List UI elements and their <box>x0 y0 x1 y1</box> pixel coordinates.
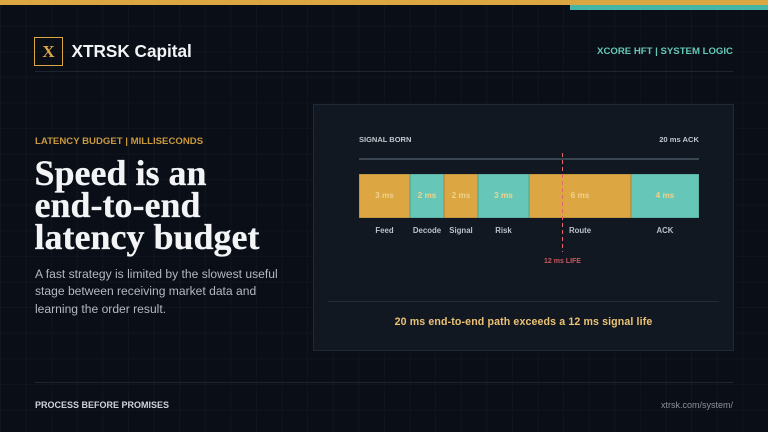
description: learning the order result. <box>35 302 166 316</box>
top accent bar: gold <box>0 0 768 5</box>
stage: signal: Signal <box>449 226 473 235</box>
stacked latency bar <box>359 174 699 218</box>
segment: ack <box>631 174 699 218</box>
label: total ack: 20 ms ACK <box>659 135 699 144</box>
headline: Speed is an <box>34 153 207 193</box>
brand name: XTRSK Capital <box>72 41 192 61</box>
logo mark <box>34 37 63 66</box>
stage: feed: Feed <box>375 226 394 235</box>
conclusion: 20 ms end-to-end path exceeds a 12 ms signal life <box>395 316 652 328</box>
segment: signal: 2 ms <box>452 191 470 200</box>
segment: feed <box>359 174 410 218</box>
stage: risk: Risk <box>495 226 512 235</box>
description: stage between receiving market data and <box>35 284 256 298</box>
segment: ack: 4 ms <box>656 191 674 200</box>
segment: decode: 2 ms <box>418 191 436 200</box>
segment: risk: 3 ms <box>494 191 513 200</box>
headline: end-to-end <box>34 185 201 225</box>
stage: route: Route <box>569 226 591 235</box>
segment: route: 6 ms <box>571 191 589 200</box>
segment: route <box>529 174 631 218</box>
segment: decode <box>410 174 444 218</box>
header tag: XCORE HFT | SYSTEM LOGIC <box>597 46 733 57</box>
segment: signal <box>444 174 478 218</box>
top accent bar: teal <box>570 5 768 10</box>
stage: decode: Decode <box>413 226 441 235</box>
description: A fast strategy is limited by the slowest useful <box>35 267 278 281</box>
footer tagline: PROCESS BEFORE PROMISES <box>35 400 169 410</box>
footer url: xtrsk.com/system/ <box>661 400 733 410</box>
stage: ack: ACK <box>657 226 673 235</box>
description <box>35 267 278 316</box>
signal life label: 12 ms LIFE <box>544 258 581 265</box>
panel: latency chart <box>313 104 734 351</box>
label: signal born: SIGNAL BORN <box>359 135 411 144</box>
logo mark: X <box>42 42 55 61</box>
signal life marker <box>562 153 563 252</box>
eyebrow: LATENCY BUDGET | MILLISECONDS <box>35 136 203 147</box>
headline: latency budget <box>34 217 260 257</box>
segment: feed: 3 ms <box>375 191 394 200</box>
segment: risk <box>478 174 529 218</box>
headline <box>34 153 260 257</box>
timeline axis <box>359 158 699 160</box>
stage labels <box>375 226 674 235</box>
